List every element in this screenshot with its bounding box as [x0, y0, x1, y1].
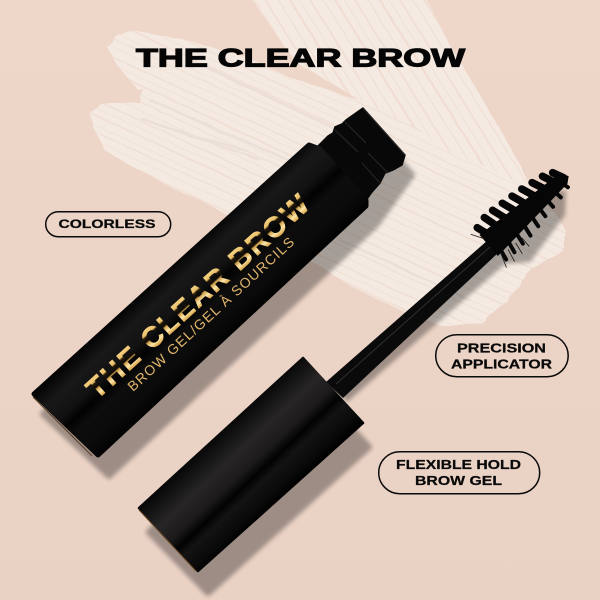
upper gel stroke — [247, 0, 538, 200]
mascara tube — [33, 108, 405, 456]
cap rim — [139, 510, 196, 571]
wand shaft — [326, 240, 498, 398]
tube base rim — [33, 397, 92, 456]
callout: precision applicator — [436, 335, 568, 377]
shadow: tube — [43, 130, 412, 476]
soft grey streaks in gel — [140, 60, 470, 300]
spoolie wand — [326, 158, 588, 398]
spoolie brush — [468, 158, 588, 271]
cream gel swatch strokes — [90, 0, 566, 326]
callout: precision applicator: PRECISION — [457, 341, 546, 356]
product name on tube: THE CLEAR BROW — [80, 189, 316, 405]
wand highlight — [336, 247, 490, 384]
callout: colorless — [46, 212, 171, 237]
callout: flexible hold brow gel: FLEXIBLE HOLD — [396, 457, 521, 472]
tube body — [34, 145, 366, 455]
cast shadows — [43, 130, 566, 593]
title: THE CLEAR BROW — [136, 44, 466, 72]
tube neck with threads — [318, 108, 405, 202]
callout: precision applicator: APPLICATOR — [451, 357, 552, 372]
main gel stroke — [90, 31, 566, 326]
product subtitle on tube: BROW GEL/GEL À SOURCILS — [124, 234, 297, 394]
shadow: wand and brush — [335, 190, 566, 402]
callout: colorless: COLORLESS — [58, 217, 156, 231]
callout: flexible hold brow gel: BROW GEL — [415, 473, 502, 488]
mascara cap — [139, 358, 363, 571]
shadow: cap — [149, 384, 369, 593]
callout: flexible hold brow gel — [379, 452, 540, 494]
cap body — [139, 358, 363, 571]
